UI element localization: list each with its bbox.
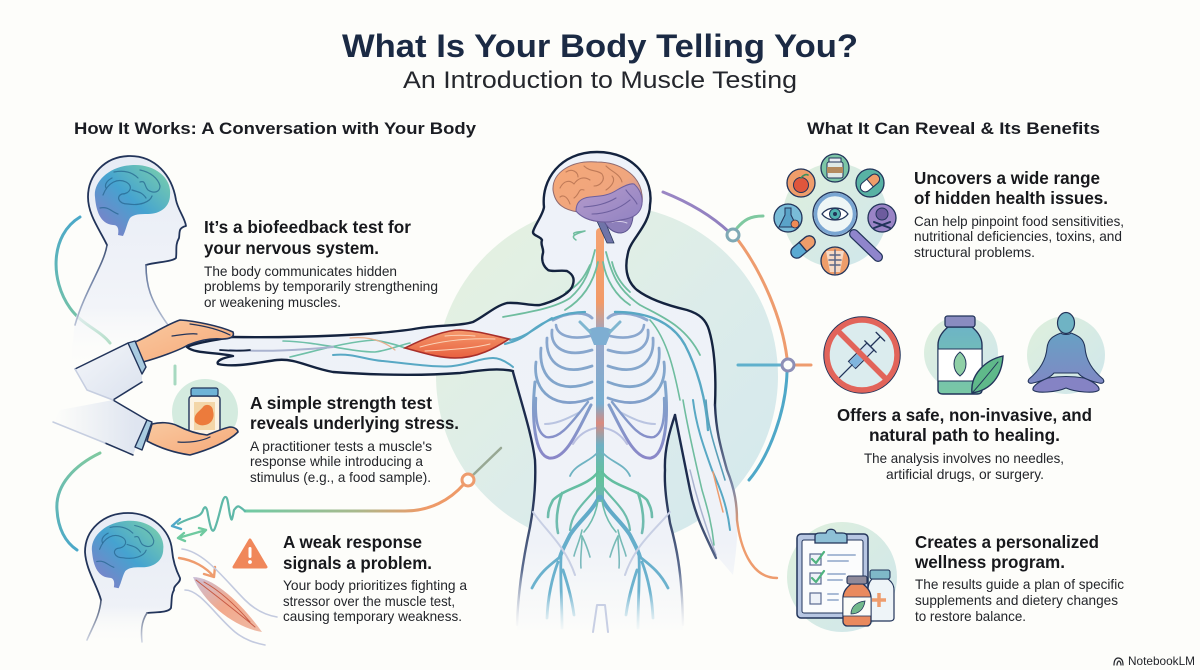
central brain [553, 162, 642, 243]
right arm nerves [683, 400, 730, 555]
text block: weak response: Your body prioritizes fighting a [283, 578, 467, 593]
connector node: upper [727, 229, 739, 241]
upper nerves [503, 231, 708, 430]
text block: hidden health issues: structural problems. [914, 245, 1035, 260]
lower hand [147, 423, 238, 455]
text block: personalized program [914, 532, 1124, 624]
icon: toxin skull [868, 204, 896, 232]
text block: weak response: stressor over the muscle test, [283, 594, 455, 609]
left connector curves [56, 217, 175, 550]
text block: safe natural path: artificial drugs, or surgery. [886, 467, 1044, 482]
icon: supplement jar [821, 154, 849, 182]
text block: hidden health issues: Can help pinpoint food sensitivities, [914, 214, 1124, 229]
waveform [178, 497, 245, 531]
icon: apple [787, 169, 815, 197]
text block: hidden health issues: of hidden health issues. [914, 188, 1108, 208]
head outline [88, 156, 186, 265]
subtitle: An Introduction to Muscle Testing [403, 67, 797, 94]
text block: biofeedback [204, 217, 438, 310]
icon: pill [788, 233, 818, 261]
icon: meditating figure [1027, 312, 1105, 394]
body outline [187, 152, 777, 625]
text block: weak response [283, 532, 467, 624]
icon cluster: hidden health issues [774, 154, 896, 275]
icon: flask [774, 204, 802, 232]
cerebrum [553, 162, 642, 222]
text block: safe natural path: natural path to healing. [869, 425, 1060, 445]
text block: personalized program: wellness program. [914, 552, 1065, 572]
icon: capsule [856, 169, 884, 197]
icon: clipboard and supplements [787, 522, 897, 632]
text block: strength test: A practitioner tests a muscle's [250, 439, 432, 454]
illustration: weak muscle [182, 549, 277, 645]
text block: strength test: reveals underlying stress. [250, 413, 459, 433]
text block: strength test: A simple strength test [250, 393, 432, 413]
body silhouette [187, 152, 737, 630]
text block: personalized program: supplements and dietery changes [915, 593, 1118, 608]
icon: natural supplement bottle and leaf [924, 316, 1003, 394]
head silhouette [85, 513, 180, 642]
text block: strength test [250, 393, 459, 485]
text block: weak response: causing temporary weakness. [283, 609, 462, 624]
title: What Is Your Body Telling You? [342, 28, 858, 64]
brain folds [560, 166, 622, 204]
bicep muscle [405, 330, 509, 358]
text block: weak response: A weak response [283, 532, 422, 552]
text block: biofeedback: It’s a biofeedback test for [204, 217, 411, 237]
icon: spine [821, 247, 849, 275]
brain [95, 165, 170, 236]
front bottle [843, 576, 871, 626]
text block: biofeedback: your nervous system. [204, 238, 379, 258]
clipboard [797, 534, 868, 618]
head outline [85, 513, 180, 613]
illustration: head with brain, top left [70, 156, 186, 372]
pale circle [172, 379, 238, 445]
temporal lobe [576, 184, 642, 222]
text block: hidden health issues: Uncovers a wide range [914, 168, 1100, 188]
crossed legs [1033, 376, 1099, 392]
nerve tree lower torso [532, 452, 668, 628]
NotebookLM logo: NotebookLM [1128, 654, 1195, 668]
text block: biofeedback: or weakening muscles. [204, 295, 341, 310]
arrow: orange to muscle [179, 558, 215, 577]
text block: personalized program: Creates a personalized [915, 532, 1099, 552]
connector node: middle [782, 359, 794, 371]
brain [92, 521, 163, 588]
arrow: blue to brain [172, 519, 181, 529]
icon: warning triangle [234, 540, 266, 567]
upper cuff [128, 341, 146, 374]
torso inner shading [533, 512, 670, 632]
brain stem [596, 219, 614, 243]
food sample [195, 405, 214, 425]
signal line with waveform [172, 448, 501, 577]
central body figure [187, 152, 777, 632]
text block: personalized program: The results guide a plan of specific [915, 577, 1124, 592]
text block: strength test: response while introducing a [250, 454, 423, 469]
icon: no needles sign [824, 317, 900, 393]
syringe [830, 331, 886, 387]
text block: biofeedback: The body communicates hidden [204, 264, 397, 279]
text block: safe natural path [837, 405, 1092, 482]
leaf [972, 356, 1003, 393]
text block: safe natural path: Offers a safe, non-invasive, and [837, 405, 1092, 425]
text block: hidden health issues: nutritional deficiencies, toxins, and [914, 229, 1122, 244]
jar [189, 396, 220, 436]
illustration: jar on open hand [135, 379, 238, 455]
illustration: head with brain, bottom left [85, 513, 180, 642]
upper hand [135, 320, 233, 362]
illustration: practitioner arm and upper hand [53, 320, 233, 455]
arms and torso [1028, 333, 1104, 383]
coat sleeve upper [75, 343, 142, 400]
coat sleeve lower [53, 400, 147, 455]
connector arcs on the right [663, 192, 811, 480]
left arm nerves [230, 338, 513, 367]
checklist [810, 552, 855, 604]
head [1058, 312, 1074, 334]
text block: strength test: stimulus (e.g., a food sample). [250, 470, 431, 485]
signal node [462, 474, 474, 486]
arrow: green double [178, 528, 206, 541]
cerebellum [603, 217, 633, 233]
head silhouette [70, 156, 186, 372]
heading: how it works: How It Works: A Conversation with Your Body [74, 119, 477, 138]
rib cage [534, 313, 666, 458]
icon: magnifying glass with eye [813, 192, 878, 257]
spinal cord and spine [596, 232, 604, 498]
text block: safe natural path: The analysis involves no needles, [864, 451, 1064, 466]
text block: weak response: signals a problem. [283, 553, 432, 573]
text block: biofeedback: problems by temporarily strengthening [204, 279, 438, 294]
central background circle [436, 205, 778, 547]
heading: what it can reveal: What It Can Reveal & Its Benefits [807, 119, 1100, 138]
lower cuff [135, 420, 152, 450]
text block: hidden health issues [914, 168, 1124, 260]
text block: personalized program: to restore balance. [915, 609, 1026, 624]
back bottle [868, 570, 894, 621]
